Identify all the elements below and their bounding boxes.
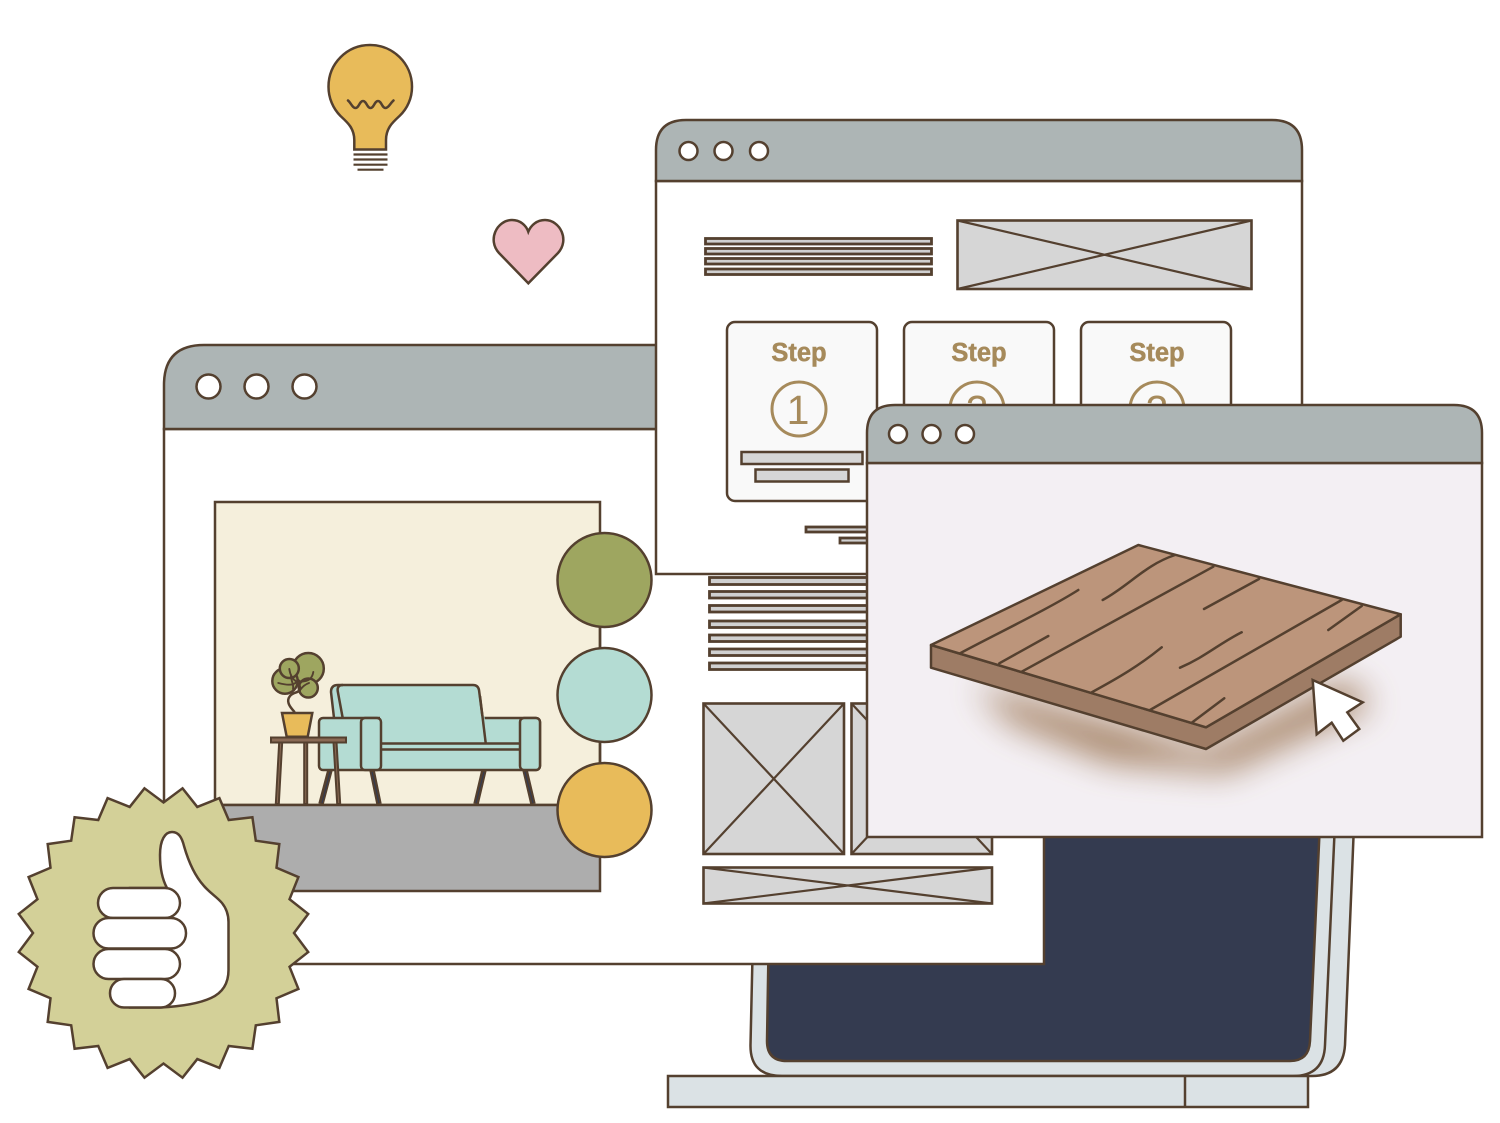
step card 3 xyxy=(1081,322,1231,501)
left window header xyxy=(164,345,700,429)
hero image placeholder xyxy=(958,220,1252,289)
badge starburst xyxy=(19,788,308,1078)
icon: light bulb xyxy=(328,45,412,170)
sofa xyxy=(319,685,540,804)
step card 1 xyxy=(727,322,877,501)
image placeholder wide xyxy=(704,868,992,904)
board front edge xyxy=(931,614,1401,749)
board top xyxy=(931,545,1401,727)
step card 3: Step xyxy=(1129,339,1185,367)
room floor xyxy=(215,805,600,891)
sofa back edge xyxy=(338,685,343,718)
front browser window xyxy=(867,405,1482,837)
front window body xyxy=(867,463,1482,837)
centre window header xyxy=(656,120,1302,181)
laptop lid front xyxy=(750,800,1336,1076)
pot xyxy=(282,713,312,737)
left window text lines xyxy=(710,578,880,670)
wood grain xyxy=(960,555,1362,723)
icon: mouse cursor xyxy=(1313,680,1363,741)
laptop lid back xyxy=(1270,800,1355,1076)
sofa back xyxy=(331,685,486,744)
laptop base xyxy=(668,1076,1308,1107)
room scene xyxy=(215,502,600,891)
sofa back lower xyxy=(380,716,486,742)
step card 2: 2 xyxy=(966,387,988,433)
hand xyxy=(130,832,228,1008)
fingers xyxy=(94,888,186,1008)
sofa legs xyxy=(321,770,533,804)
sofa seat xyxy=(319,718,540,770)
icon: heart xyxy=(494,220,563,283)
heading text lines xyxy=(706,238,932,274)
front window buttons xyxy=(889,425,974,443)
step card 2: Step xyxy=(951,339,1007,367)
caption lines xyxy=(806,527,890,543)
plant leaves xyxy=(272,653,324,698)
centre window buttons xyxy=(680,142,768,160)
wood board xyxy=(931,545,1401,749)
centre window body xyxy=(656,181,1302,574)
step card 2 xyxy=(904,322,1054,501)
left browser window xyxy=(164,345,1044,964)
sofa back right edge xyxy=(480,696,486,743)
sofa cushion lines xyxy=(381,744,520,750)
left window buttons xyxy=(196,374,316,398)
board shadow xyxy=(975,680,1372,772)
colour swatches xyxy=(558,533,652,857)
potted plant xyxy=(272,653,324,737)
colour swatch connector xyxy=(599,620,601,775)
image placeholder square 1 xyxy=(704,704,844,854)
front window header xyxy=(867,405,1482,463)
side table xyxy=(271,738,346,804)
room wall xyxy=(215,502,600,805)
badge: thumbs up xyxy=(19,788,308,1078)
step card 1: Step xyxy=(771,339,827,367)
step card 1: 1 xyxy=(787,387,809,433)
left window body xyxy=(164,429,1044,964)
sofa right arm xyxy=(520,718,540,770)
step card 3: 3 xyxy=(1146,387,1168,433)
image placeholder square 2 xyxy=(852,704,992,854)
laptop screen xyxy=(767,800,1321,1061)
laptop xyxy=(668,800,1355,1107)
plant stem xyxy=(288,690,300,712)
centre browser window xyxy=(656,120,1302,574)
sofa left arm xyxy=(361,718,381,770)
